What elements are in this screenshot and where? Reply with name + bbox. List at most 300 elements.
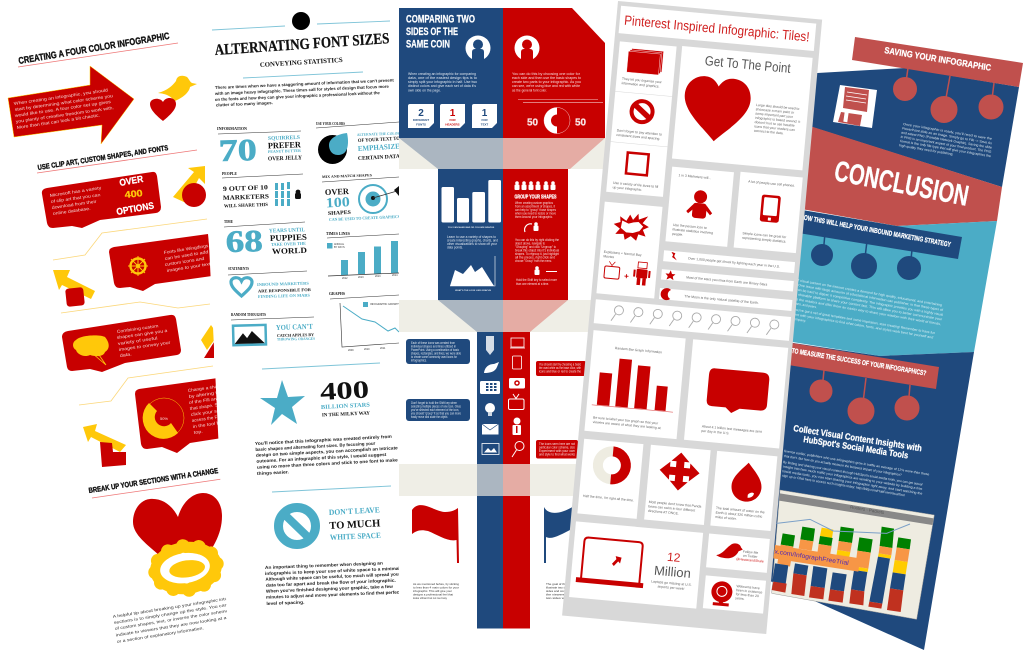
subtitle [243, 57, 363, 78]
tile: twitter bird [706, 533, 770, 573]
donut: 50 50: 50 [527, 118, 538, 128]
icon: bird [484, 362, 499, 373]
callout: microsoft clip art: online database. [52, 206, 91, 216]
icon: blue flag [544, 506, 574, 563]
red header block [503, 8, 605, 138]
icon column: blue [477, 332, 503, 628]
stat tiles [408, 104, 497, 128]
paragraph: When creating an infographic for comparing [408, 72, 476, 76]
chart: line graph: 2009 [348, 349, 354, 352]
statistic: 400 billion stars [260, 376, 371, 425]
tile: four way arrows: Most people don't know that Panda [649, 500, 702, 509]
chart: time line bars: TIMES LINES [326, 232, 350, 236]
stat tiles: TEXT [481, 122, 488, 126]
statistic: 400 billion stars: 400 [319, 376, 370, 406]
text block: saving instructions: high quality they need for publishing. [899, 143, 954, 156]
banner: saving your infographic [852, 37, 1023, 87]
text block: measure section: By finding and sharing your visual content through HubSpot's social media tools, you can get actual [783, 460, 923, 487]
callout: microsoft clip art: of clip art that you can [50, 192, 101, 204]
statistic: 68 years: YEARS UNTIL [269, 227, 305, 234]
red arrow with intro text: would like to use. A four color set up gives [14, 99, 111, 118]
callout: red second note: and style to find what works [539, 452, 575, 456]
callout: red first note: icons and blue or red to create the [539, 370, 581, 374]
statistic: use your colors: EMPHASIZE [358, 141, 400, 153]
paragraph: other visualizations to show off your [447, 242, 498, 246]
callout: red first note [536, 361, 586, 376]
text block: under red flag: to less than 4 main colors for your [413, 586, 459, 590]
callout: red first note: the used white as the base color, with [539, 366, 581, 370]
text block: teal section: of visual content on the internet creates a demand for high quality, educational, and entertaining [796, 278, 943, 307]
paragraph: data points. [447, 246, 463, 250]
callout: microsoft clip art: OPTIONS [116, 201, 155, 218]
tile strip: star [661, 269, 794, 292]
statistic: over 100 shapes: SHAPES [328, 210, 351, 217]
blue middle block with charts: YOU CAN MAKE BAR OR COLUMN GRAPHS [448, 226, 495, 229]
callout: microsoft clip art: Microsoft has a variety [49, 185, 103, 198]
statistic: 70 squirrels: PEANUT BUTTER [268, 148, 301, 154]
stat tiles: DIFFERENT [413, 118, 429, 122]
heading: don't leave too much white space [329, 505, 381, 542]
statistic: 70 squirrels: SQUIRRELS [268, 135, 300, 142]
statistic: over 100 shapes [322, 173, 401, 222]
text block: section tip: A helpful tip about breaking up your infographic into [112, 596, 229, 619]
icon: keypad [480, 381, 500, 394]
circles on strings [894, 68, 1003, 122]
paragraph [515, 238, 559, 263]
band: conclusion [790, 125, 1002, 226]
statistic: random thoughts: RANDOM THOUGHTS [231, 313, 266, 317]
statistic: over 100 shapes: CAN BE USED TO CREATE GRAPHICS [329, 214, 401, 222]
callout: blue shift key note [406, 399, 470, 421]
text block: white space: data too far apart and break the flow of your infographic. [266, 578, 396, 588]
statistic: 68 years: TAKE OVER THE [271, 241, 306, 247]
text block: basic shapes: using no more than three colors and stick to one font to make [257, 457, 398, 470]
icon: person and dash [534, 266, 557, 275]
text block: basic shapes: outcome. For an infographic of this style, I would suggest [256, 452, 387, 464]
statistic: inbound marketers: STATEMENTS [228, 267, 249, 271]
text block: under red flag: looks vibrant but not too busy [413, 596, 447, 600]
text block: under red flag: infographic. This will give your [413, 589, 452, 593]
icon: black circle with teal drop [318, 133, 348, 164]
tile: water drop: The total amount of water on the [716, 506, 765, 514]
callout: blue shift key note: easily move and scale the object. [411, 415, 448, 419]
tile: water drop [710, 451, 777, 531]
paragraph: as the general font color. [512, 88, 547, 92]
heading: break up your sections [88, 466, 222, 498]
tile: laptop: 12 [667, 550, 681, 565]
paragraph [512, 72, 581, 92]
chart: time line bars: 2013 [375, 275, 381, 278]
statistic: use your colors: ALTERNATE THE COLOR [357, 131, 400, 137]
statistic: use your colors: CERTAIN DATA [358, 154, 400, 162]
tile: person: illustrate statistics involving [672, 227, 713, 235]
statistic: 9 out of 10 marketers: WILL SHARE THIS [224, 203, 268, 209]
paragraph: "Grouping" and click "Ungroup" to [515, 245, 556, 249]
statistic: 9 out of 10 marketers: PEOPLE [222, 172, 238, 176]
beige bands [399, 138, 629, 496]
heading: use clip art: USE CLIP ART, CUSTOM SHAPES, AND FONTS [37, 143, 169, 172]
icon: laptop [510, 338, 525, 348]
tile: title: Pinterest Inspired Infographic: Tiles! [624, 13, 810, 44]
tile: get to the point: connect to the data. [754, 129, 784, 135]
chart: line graph: 2010 [364, 348, 370, 351]
paragraph: all the pieces, right click and [515, 256, 555, 260]
callout: blue shift key note: selecting multiple pieces of one icon. Once [411, 404, 461, 408]
tile: person [665, 167, 734, 247]
title: SIDES OF THE [406, 26, 458, 38]
tile: explosions [596, 202, 663, 299]
text block: section tip: sections is to simply change up the style. You can [113, 602, 229, 625]
tile: get to the point [672, 46, 813, 170]
statistic: 68 years: TIME [224, 220, 234, 224]
text block: basic shapes: things easier. [257, 469, 289, 476]
text block: section tip: of custom shapes, text, or inverse the color scheme [114, 608, 230, 631]
circles on strings: measure [810, 370, 919, 424]
callout: wingdings fonts: can be used to add [164, 249, 209, 261]
icon: pencil [486, 336, 494, 355]
paragraph: create interesting graphs, charts, and [447, 238, 498, 242]
text block: under red flag [413, 582, 459, 600]
chart: line graph [329, 292, 400, 352]
callout: custom shapes: shapes can give you a [116, 328, 168, 340]
tile: get to the point: doesn't hurt to use liveable [754, 120, 795, 128]
tile: laptop: Laptops go missing at U.S. [651, 579, 692, 587]
text block: measure section: insight into how much traffic your infographics are sending to your website by building a free [783, 465, 923, 491]
statistic: use your colors [316, 122, 400, 164]
banner: how this will help [786, 208, 962, 259]
statistic: inbound marketers: INBOUND MARKETERS [257, 281, 310, 287]
callout: custom shapes: images to convey your [118, 340, 171, 352]
icon grid: people [275, 182, 301, 206]
tile: laptop: airports per week! [657, 585, 685, 591]
text block: white space: Although white space can be useful, too much will spread your [265, 572, 401, 582]
tile: hollow square [606, 142, 667, 197]
heading: don't leave too much white space: WHITE SPACE [330, 531, 381, 542]
banner: how to measure [776, 341, 939, 389]
connector line [53, 219, 207, 260]
chart: line graph: GRAPHS [329, 292, 345, 296]
icon: camera [509, 378, 525, 388]
panel: conclusion [770, 37, 1023, 650]
callout: wingdings fonts [109, 234, 212, 291]
text block: basic shapes: design on two simple aspects, you can accomplish an intricate [256, 445, 398, 458]
tile strip: lightning [663, 250, 795, 273]
text block: teal section: , sharable platform to share your content fast. This will allow you to better communicate your [796, 292, 943, 322]
tile: speech bubble: About 4.1 billion text messages are sent [702, 424, 762, 434]
statistic: inbound marketers [228, 267, 312, 299]
tile: water drop: miles of water. [715, 515, 737, 521]
icon: floppy disk [833, 85, 877, 128]
divider rule [262, 363, 380, 369]
tile: no sign [611, 92, 672, 147]
icon: picture [482, 444, 499, 454]
chart: time line bars: ANNUAL [334, 243, 345, 246]
statistic: inbound marketers: ARE RESPONSIBLE FOR [258, 287, 312, 293]
icon: yellow cloud [144, 534, 228, 602]
paragraph [516, 278, 557, 286]
text block: saving instructions: Once your infographic is ready, you'll need to save the [903, 122, 992, 141]
tile: explosions: Explosions + Normal Bay [604, 250, 642, 257]
band: conclusion: CONCLUSION [832, 155, 971, 213]
callout: wingdings fonts: images to your text [166, 261, 212, 273]
red arrow with intro text: More than that can look a bit chaotic. [16, 112, 100, 130]
tile: stacked tiles: They let you organize your [622, 77, 663, 84]
statistic: 70 squirrels [217, 127, 303, 168]
tile: hollow square: Use a variety of tile sizes to fill [613, 181, 659, 189]
paragraph: object above, navigate to [515, 242, 545, 246]
tile: get to the point: infographic is based around. It [755, 116, 800, 124]
paragraph: shapes. To regroup it, just highlight [515, 252, 559, 256]
icon: yellow bird [158, 76, 197, 101]
text block: under red flag: designs a professional feel that [413, 592, 453, 596]
tile: twitter bird: on Twitter [743, 554, 759, 559]
text block: saving instructions: in PNG is an important aspect of your final product. The PNG [900, 135, 992, 154]
statistic: 400 billion stars: IN THE MILKY WAY [322, 411, 370, 418]
chart: time line bars: 2013 [358, 276, 364, 279]
statistic: 68 years: 68 [225, 223, 263, 259]
donut: 50 50 [527, 108, 586, 134]
icon row: people [514, 181, 556, 190]
callout: red second note: Experiment with your own [539, 449, 575, 453]
title [406, 14, 475, 50]
panel: four color infographic [8, 31, 242, 644]
text block: section tip: indicate to viewers that they are now looking at a [115, 615, 228, 637]
callout: donut chart [135, 378, 242, 453]
callout: donut chart: Change a shape's color [187, 381, 238, 393]
intro text [214, 77, 394, 107]
tile: webcam: for less than 20 [736, 592, 759, 598]
tile: twitter bird: Follow Me [743, 550, 759, 555]
paragraph [447, 235, 498, 250]
tile strip: star: Most of the stars you miss from Earth are Binary Stars [686, 275, 768, 287]
banner: how to measure: HOW TO MEASURE THE SUCCESS OF YOUR INFOGRAPHICS? [778, 346, 927, 377]
tile: phone: A lot of people use cell phones. [748, 180, 795, 188]
statistic: over 100 shapes: OVER [325, 186, 350, 197]
icon: person with tie [512, 418, 521, 435]
bars [772, 527, 911, 612]
circles on strings: teal section [812, 233, 920, 280]
statistic: 70 squirrels: OVER JELLY [268, 155, 303, 162]
callout: blue shift key note: Don't forget to hold the Shift key when [411, 401, 457, 405]
chart: line graph: INFOGRAPHIC GROWTH [370, 303, 400, 306]
statistic: random thoughts: YOU CAN'T [276, 322, 313, 332]
tile: four way arrows: directions AT ONCE. [648, 509, 679, 516]
callout: blue shift key note: you've selected each element of the icon, [411, 408, 459, 412]
callout: red second note [536, 440, 578, 458]
text block: under blue flag [546, 582, 587, 600]
tile: twitter bird: @HectorandShale [736, 557, 764, 564]
callout: blue shift key note: you should "group" it so that you can more [411, 412, 461, 416]
statistic: use your colors: OF YOUR TEXT TO [358, 137, 400, 144]
paragraph: create two parts to your infographic. As you [512, 80, 581, 84]
text block: teal section: to the readers and offer them an easier way to share your wisdom with their world of friends, [795, 297, 941, 326]
tile: webcam [703, 575, 766, 614]
icon: red flag [412, 505, 459, 563]
tile: person: people. [672, 232, 683, 237]
callout: red second note: particular color scheme, size [539, 446, 575, 450]
intro text: with an image heavy infographic. These times call for styles of design that focus more [214, 84, 390, 96]
chart: time line bars: 2014 [392, 274, 398, 277]
callout: custom shapes: variety of useful [117, 335, 158, 346]
callout: donut chart: in the tool bar at the [192, 418, 239, 429]
callout: blue icons note: to create some commonly used icons for [411, 355, 458, 359]
text block: white space [265, 560, 401, 606]
statistic: 70 squirrels: 70 [218, 132, 257, 168]
tile strip: lightning: Over 1,000 people get struck by lighting each year in the U.S. [688, 256, 780, 269]
blue section: measure [770, 341, 974, 650]
tile: four way arrows [644, 445, 711, 525]
text block: measure section: social media tools, you can start sharing your infographic right away, and start watching the [782, 469, 923, 496]
callout: microsoft clip art: 400 [124, 188, 143, 201]
red middle block: GROUP YOUR SHAPES [514, 194, 557, 200]
tile: bar graph: viewers are aware of what they are looking at. [593, 420, 662, 430]
callout: blue icons note [406, 339, 470, 364]
tile: phone: representing simple statistics. [742, 236, 787, 244]
text block: measure section [782, 449, 930, 497]
stat tiles: 1 [482, 108, 488, 119]
statistic: use your colors: USE YOUR COLORS [316, 122, 345, 126]
tile: stacked tiles [615, 41, 677, 96]
title: COMPARING TWO [406, 14, 475, 26]
tile: bar graph: Random Bar Graph Information [615, 346, 662, 354]
banner: url [773, 545, 860, 572]
callout: blue icons note: shapes, rectangles, and lines, we were able [411, 352, 461, 356]
paragraph [408, 72, 477, 92]
text block: measure section: that don't. But how do you actually measure the business impact of your infographics? [784, 454, 902, 477]
tile: half donut: Half the time, I'm right all the time. [583, 494, 634, 502]
banner: how this will help: HOW THIS WILL HELP YOUR INBOUND MARKETING STRATEGY [800, 214, 952, 249]
text block: saving instructions: format is the only file type that will give your infographics the [900, 139, 991, 158]
icon: magnifier [512, 442, 524, 457]
icon: tablet [512, 356, 522, 369]
text block: teal section: ent with your infographics to find what colors, fonts, and styles work best for yourself and [794, 312, 934, 340]
paragraph: from an assortment of shapes, it [515, 204, 555, 208]
text block: teal section: ompany. [794, 317, 806, 323]
text block: measure section: ference earlier, publishers who use infographics grow in traffic an average of 12% more than those [784, 449, 930, 477]
tile: person: 1 in 3 Marketers will... [678, 173, 711, 180]
icon: blue avatar [466, 36, 490, 60]
callout: red first note: You should start by choosing a basic [539, 362, 581, 366]
heading: break up your sections: BREAK UP YOUR SECTIONS WITH A CHANGE [88, 466, 219, 495]
heading: collect visual content insights: HubSpot's Social Media Tools [803, 434, 909, 461]
callout: custom shapes: data. [119, 351, 132, 358]
callout: donut chart: 50% [160, 416, 168, 421]
banner: url: x.com/InfographFreeTrial [774, 548, 849, 567]
callout: donut chart: that shape. Simply right [189, 399, 241, 411]
paragraph: them around your infographic. [515, 215, 553, 219]
title: ALTERNATING FONT SIZES [214, 30, 390, 59]
banner: saving your infographic: SAVING YOUR INFOGRAPHIC [884, 45, 992, 73]
callout: custom shapes: Combining custom [116, 323, 159, 334]
tile: bar graph: Be sure to label your bar graph so that your [593, 415, 659, 425]
intro text: There are times when we have a staggering amount of information that we can't present [215, 77, 394, 90]
statistic: over 100 shapes: 100 [325, 195, 350, 211]
connector line [79, 366, 213, 405]
blue header block [399, 8, 503, 138]
subtitle: CONVEYING STATISTICS [260, 57, 343, 69]
text block: saving instructions [899, 122, 993, 158]
callout: microsoft clip art [42, 172, 161, 228]
title: SAME COIN [406, 38, 450, 50]
callout: microsoft clip art: download from their [51, 199, 97, 210]
text block: section tip: or a section of explanatory information. [116, 625, 204, 644]
text block: section tip [112, 596, 230, 644]
stat tiles: FOR [449, 118, 456, 122]
icon: big red heart [133, 493, 222, 565]
callout: donut chart: of the Fill and Line of [188, 393, 238, 405]
text block: white space: When you've finished designing your graphic, take a few [266, 584, 394, 594]
paragraph: You can do this by choosing one color for [512, 72, 581, 76]
intro text: on the fonts and how they can give your infographic a professional look without the [215, 90, 381, 102]
callout: blue icons note: infographics. [411, 358, 427, 362]
tile: phone: Simple icons can be great for [742, 231, 787, 239]
text block: under blue flag: sides and compare them with [546, 589, 586, 593]
tile: hollow square: up your infographic. [612, 185, 642, 192]
text block: white space: level of spacing. [266, 600, 305, 606]
connector line [61, 302, 210, 313]
icon: arc and person [525, 222, 538, 232]
text block: teal section: fans, and peers. [795, 302, 817, 309]
bar chart [442, 180, 501, 222]
stat tiles: 1 [450, 108, 456, 119]
paragraph: When creating custom graphics [515, 201, 553, 205]
callout: blue icons note: individual shapes and lines utilized in [411, 344, 456, 348]
statistic: random thoughts: CATCH APPLES BY [277, 332, 314, 338]
callout: donut chart: by altering the color [188, 387, 237, 399]
icon: television [508, 394, 524, 410]
text block: basic shapes: basic shapes and alternating font sizes. By focusing your [255, 441, 376, 452]
blue middle block with charts [438, 169, 503, 300]
callout: blue icons note: Each of these icons was created from [411, 341, 455, 345]
paragraph: can help to "group" those shapes [515, 208, 556, 212]
callout: donut chart: click your shape to [190, 406, 235, 417]
text block: white space: infographic is to keep your use of white space to a minimal [265, 566, 400, 576]
text block: saving instructions: and select PNG (Portable Network Graphic). Saving the slide [901, 131, 992, 150]
statistic: 70 squirrels: PREFER [268, 139, 302, 150]
red arrow with intro text: When creating an infographic, you should [13, 87, 109, 106]
tile: four way arrows: bears can swim in four different [648, 504, 695, 513]
callout: donut chart: top. [193, 429, 203, 435]
tile: person: Use the person icon to [673, 223, 707, 230]
callout: wingdings fonts: Fonts like Wingdings [163, 243, 209, 255]
top circle and rules [212, 12, 390, 30]
callout: red second note: The icons seen here are not [539, 442, 575, 446]
icon: partial arrow and red shape [201, 325, 218, 358]
tile: get to the point: icons that your readers can [754, 124, 795, 132]
paragraph: Hold the Shift key to select more [516, 278, 557, 282]
tile strip: moon [659, 287, 792, 311]
tile: no sign: Don't forget to pay attention to [617, 128, 662, 137]
callout: donut chart: access the Format Menu [191, 411, 242, 423]
intro text: clutter of too many images. [216, 100, 273, 107]
icon: light bulb [485, 403, 495, 416]
divider rule [272, 486, 391, 492]
tile: get to the point: Large tiles should be used to [756, 103, 800, 111]
donut: 50 50: 50 [575, 118, 586, 128]
tile strip: magnifiers [594, 299, 791, 341]
text block: basic shapes [255, 434, 398, 476]
statistic: random thoughts: THROWING ORANGES [277, 337, 315, 341]
tile strip: moon: The Moon is the only natural satellite of the Earth. [684, 294, 759, 305]
tile: webcam: years. [735, 596, 745, 601]
paragraph: simply split your infographic in half. Use two [408, 80, 477, 84]
text block: under blue flag: the viewers. It should be [546, 592, 587, 596]
tile: bar graph [584, 330, 686, 439]
text block: teal section [794, 278, 944, 340]
icon: teal heart outline [231, 278, 252, 296]
tile: half donut [577, 439, 643, 519]
icon column: red [503, 332, 530, 628]
